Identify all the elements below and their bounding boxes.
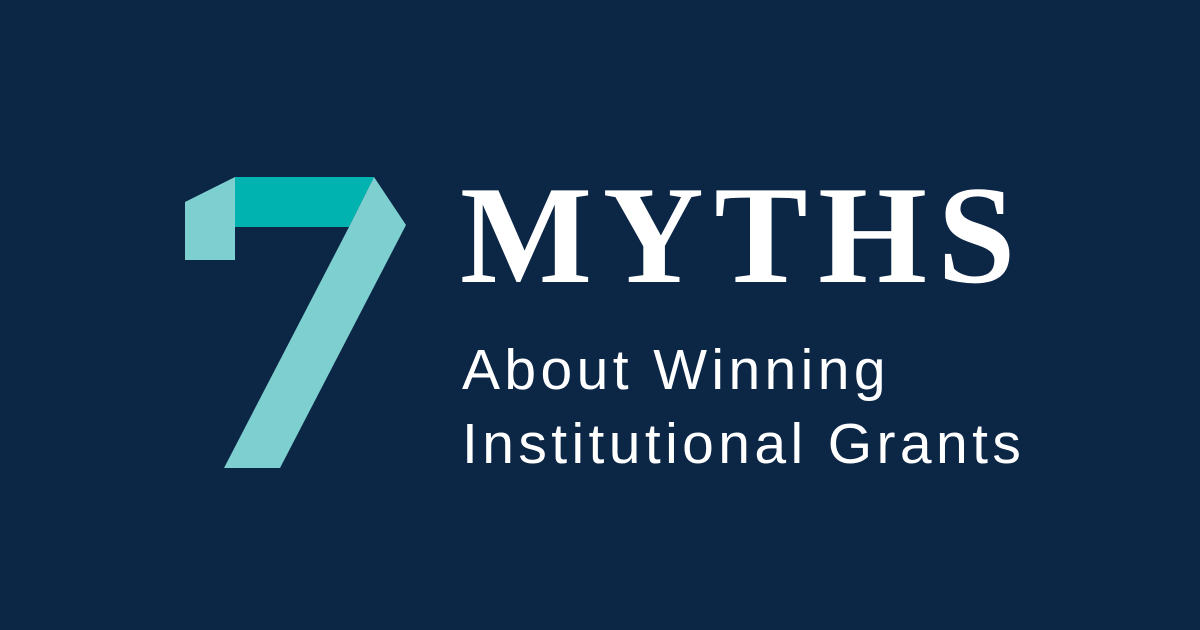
subtitle line 1: About Winning [462,338,890,402]
title: MYTHS: MYTHS [460,158,1026,313]
subtitle line 2: Institutional Grants [462,412,1025,476]
